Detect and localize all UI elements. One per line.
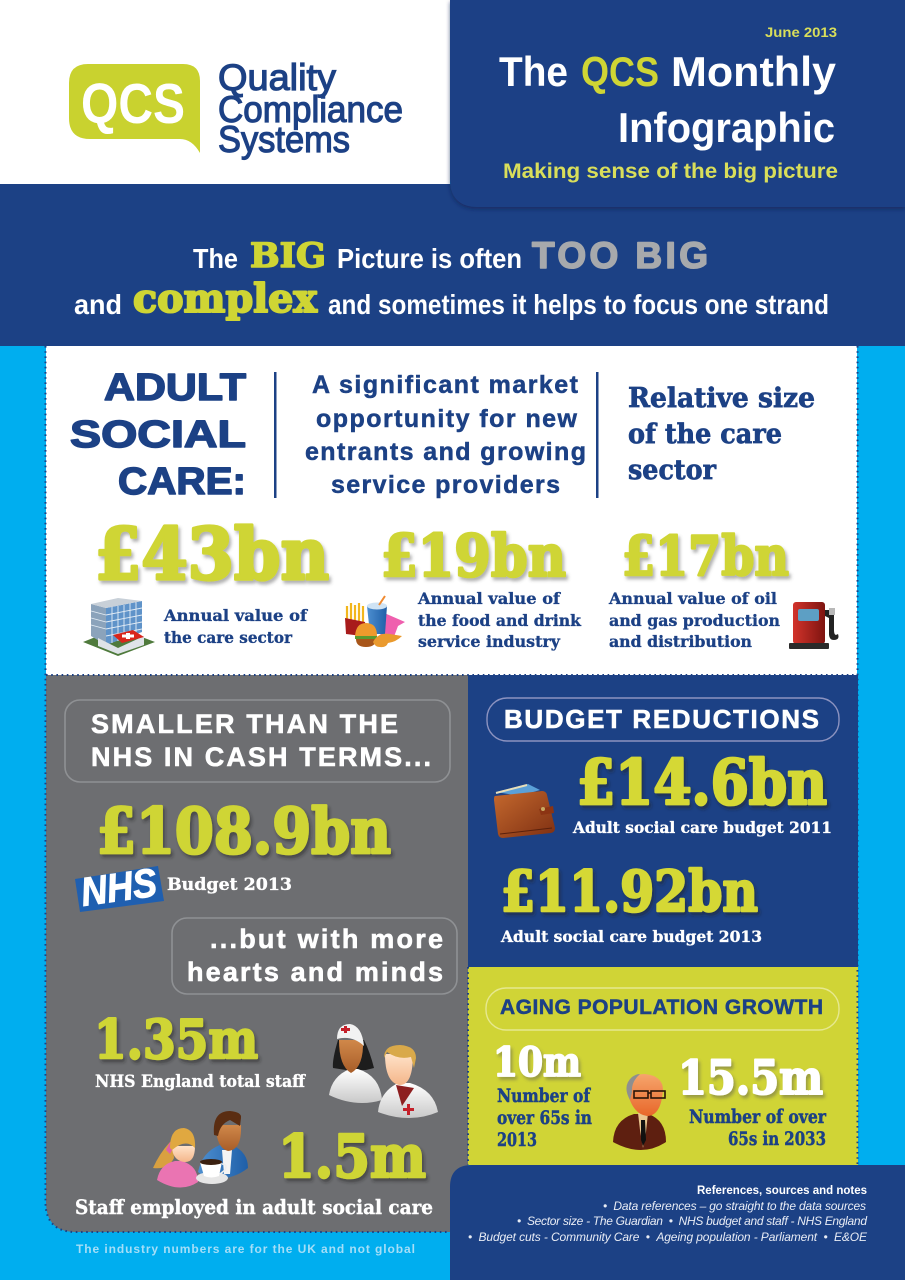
- heading box: hearts and minds: [172, 918, 457, 994]
- label: over 65s 2033: 65s in 2033: [728, 1128, 826, 1150]
- stat: £19bn: £19bn: [381, 522, 566, 590]
- headline line 2: [74, 276, 829, 322]
- title: QCS: [581, 48, 659, 95]
- panel: navy banner: [0, 184, 905, 346]
- stat: 1.35m: 1.35m: [94, 1009, 258, 1071]
- text: relative size: sector: [628, 455, 717, 486]
- label: budget 2013: Budget 2013: [167, 875, 292, 895]
- label: over 65s 2033: Number of over: [689, 1106, 827, 1128]
- label: over 65s 2013: 2013: [497, 1129, 537, 1151]
- heading: adult social care: [70, 367, 246, 503]
- icon: fuel pump: [789, 602, 838, 649]
- stat: 1.5m: 1.5m: [278, 1122, 426, 1191]
- heading box: hearts and minds: hearts and minds: [187, 957, 443, 987]
- date: June 2013: [765, 24, 837, 40]
- icon: fast food: [345, 596, 405, 647]
- label: NHS England staff: NHS England total staff: [95, 1072, 306, 1092]
- text: market opportunity: service providers: [331, 471, 560, 499]
- title: Infographic: [618, 104, 835, 151]
- heading box: budget reductions: [487, 698, 839, 741]
- title: The: [499, 48, 568, 95]
- label: food and drink: [417, 589, 582, 651]
- references list: • Sector size - The Guardian • NHS budget and staff - NHS England: [517, 1214, 867, 1228]
- title: Monthly: [671, 48, 837, 95]
- text: market opportunity: [305, 371, 586, 499]
- heading box: smaller than the NHS: NHS IN CASH TERMS...: [91, 742, 431, 772]
- label: oil and gas: and gas production: [609, 611, 780, 630]
- label: care sector: Annual value of: [163, 606, 308, 625]
- heading: adult social care: SOCIAL: [70, 414, 246, 456]
- logo wordmark: Systems: [218, 119, 350, 160]
- label: care sector: the care sector: [164, 628, 293, 647]
- label: food and drink: Annual value of: [417, 589, 561, 608]
- stat: £14.6bn: £14.6bn: [577, 746, 827, 819]
- label: social care staff: Staff employed in adult social care: [75, 1195, 433, 1219]
- label: over 65s 2013: [497, 1085, 592, 1151]
- heading box: budget reductions: BUDGET REDUCTIONS: [504, 704, 819, 734]
- label: over 65s 2033: [689, 1106, 827, 1150]
- label: food and drink: the food and drink: [418, 611, 582, 630]
- text: relative size: [628, 383, 815, 486]
- label: oil and gas: [608, 589, 780, 651]
- label: budget 2013: Adult social care budget 2013: [500, 927, 762, 946]
- title: [499, 48, 837, 151]
- headline line 2: and sometimes it helps to focus one strand: [328, 289, 829, 320]
- label: oil and gas: and distribution: [609, 632, 752, 651]
- stat: 15.5m: 15.5m: [678, 1051, 823, 1106]
- heading box: aging population growth: AGING POPULATION GROWTH: [500, 996, 823, 1019]
- label: budget 2011: Adult social care budget 2011: [572, 818, 832, 837]
- footnote: The industry numbers are for the UK and not global: [76, 1242, 415, 1256]
- icon: carers with coffee: [153, 1111, 248, 1188]
- icon: hospital building: [83, 598, 155, 656]
- icon: speech bubble with QCS: [69, 64, 200, 153]
- dividers: [274, 372, 598, 498]
- label: oil and gas: Annual value of oil: [608, 589, 777, 608]
- stat: £43bn: £43bn: [95, 512, 329, 596]
- label: over 65s 2013: Number of: [497, 1085, 591, 1107]
- icon: wallet: [494, 784, 555, 838]
- label: food and drink: service industry: [418, 632, 561, 651]
- heading: adult social care: ADULT: [104, 367, 246, 409]
- logo wordmark: [218, 57, 403, 160]
- text: market opportunity: opportunity for new: [316, 405, 578, 433]
- panel: logo area: [0, 0, 450, 184]
- references list: • Budget cuts - Community Care • Ageing population - Parliament • E&OE: [468, 1230, 868, 1244]
- heading box: smaller than the NHS: SMALLER THAN THE: [91, 709, 398, 739]
- references heading: References, sources and notes: [697, 1183, 867, 1197]
- panel: budget reductions: [468, 675, 858, 967]
- headline line 2: and: [74, 289, 122, 320]
- stat: £108.9bn: £108.9bn: [97, 794, 391, 868]
- label: care sector: [163, 606, 308, 647]
- label: over 65s 2013: over 65s in: [497, 1107, 592, 1129]
- panel: title block: [450, 0, 905, 207]
- text: market opportunity: entrants and growing: [305, 438, 586, 466]
- text: market opportunity: A significant market: [312, 371, 579, 399]
- headline line 1: TOO BIG: [532, 235, 708, 276]
- references list: [468, 1199, 868, 1244]
- text: relative size: of the care: [628, 419, 782, 450]
- headline line 1: [193, 235, 708, 276]
- panel: adult social care: [46, 346, 857, 675]
- headline line 1: Picture is often: [337, 243, 522, 274]
- subtitle: Making sense of the big picture: [503, 160, 838, 183]
- panel: references: [450, 1165, 905, 1280]
- headline line 1: The: [193, 243, 238, 274]
- icon: elderly man: [613, 1074, 666, 1150]
- icon: speech bubble with QCS: QCS: [81, 72, 185, 136]
- panel: NHS comparison: [46, 675, 468, 1232]
- headline line 1: BIG: [250, 236, 326, 276]
- headline line 2: complex: [133, 276, 318, 322]
- stat: £17bn: £17bn: [622, 524, 789, 588]
- banner headline: [74, 235, 829, 322]
- icon: NHS logo: NHS: [78, 861, 160, 915]
- panel: aging population: [468, 967, 858, 1165]
- heading box: smaller than the NHS: [65, 700, 450, 782]
- heading box: hearts and minds: ...but with more: [210, 924, 443, 954]
- stat: 10m: 10m: [493, 1039, 581, 1086]
- logo: QCS Quality Compliance Systems: [69, 57, 403, 160]
- references list: • Data references – go straight to the data sources: [603, 1199, 866, 1213]
- heading box: aging population growth: [486, 988, 839, 1030]
- stat: £11.92bn: £11.92bn: [501, 859, 758, 925]
- heading: adult social care: CARE:: [118, 461, 246, 503]
- logo wordmark: Compliance: [218, 89, 403, 130]
- logo wordmark: Quality: [218, 57, 337, 98]
- text: relative size: Relative size: [628, 383, 815, 414]
- icon: nurse and doctor: [329, 1024, 438, 1118]
